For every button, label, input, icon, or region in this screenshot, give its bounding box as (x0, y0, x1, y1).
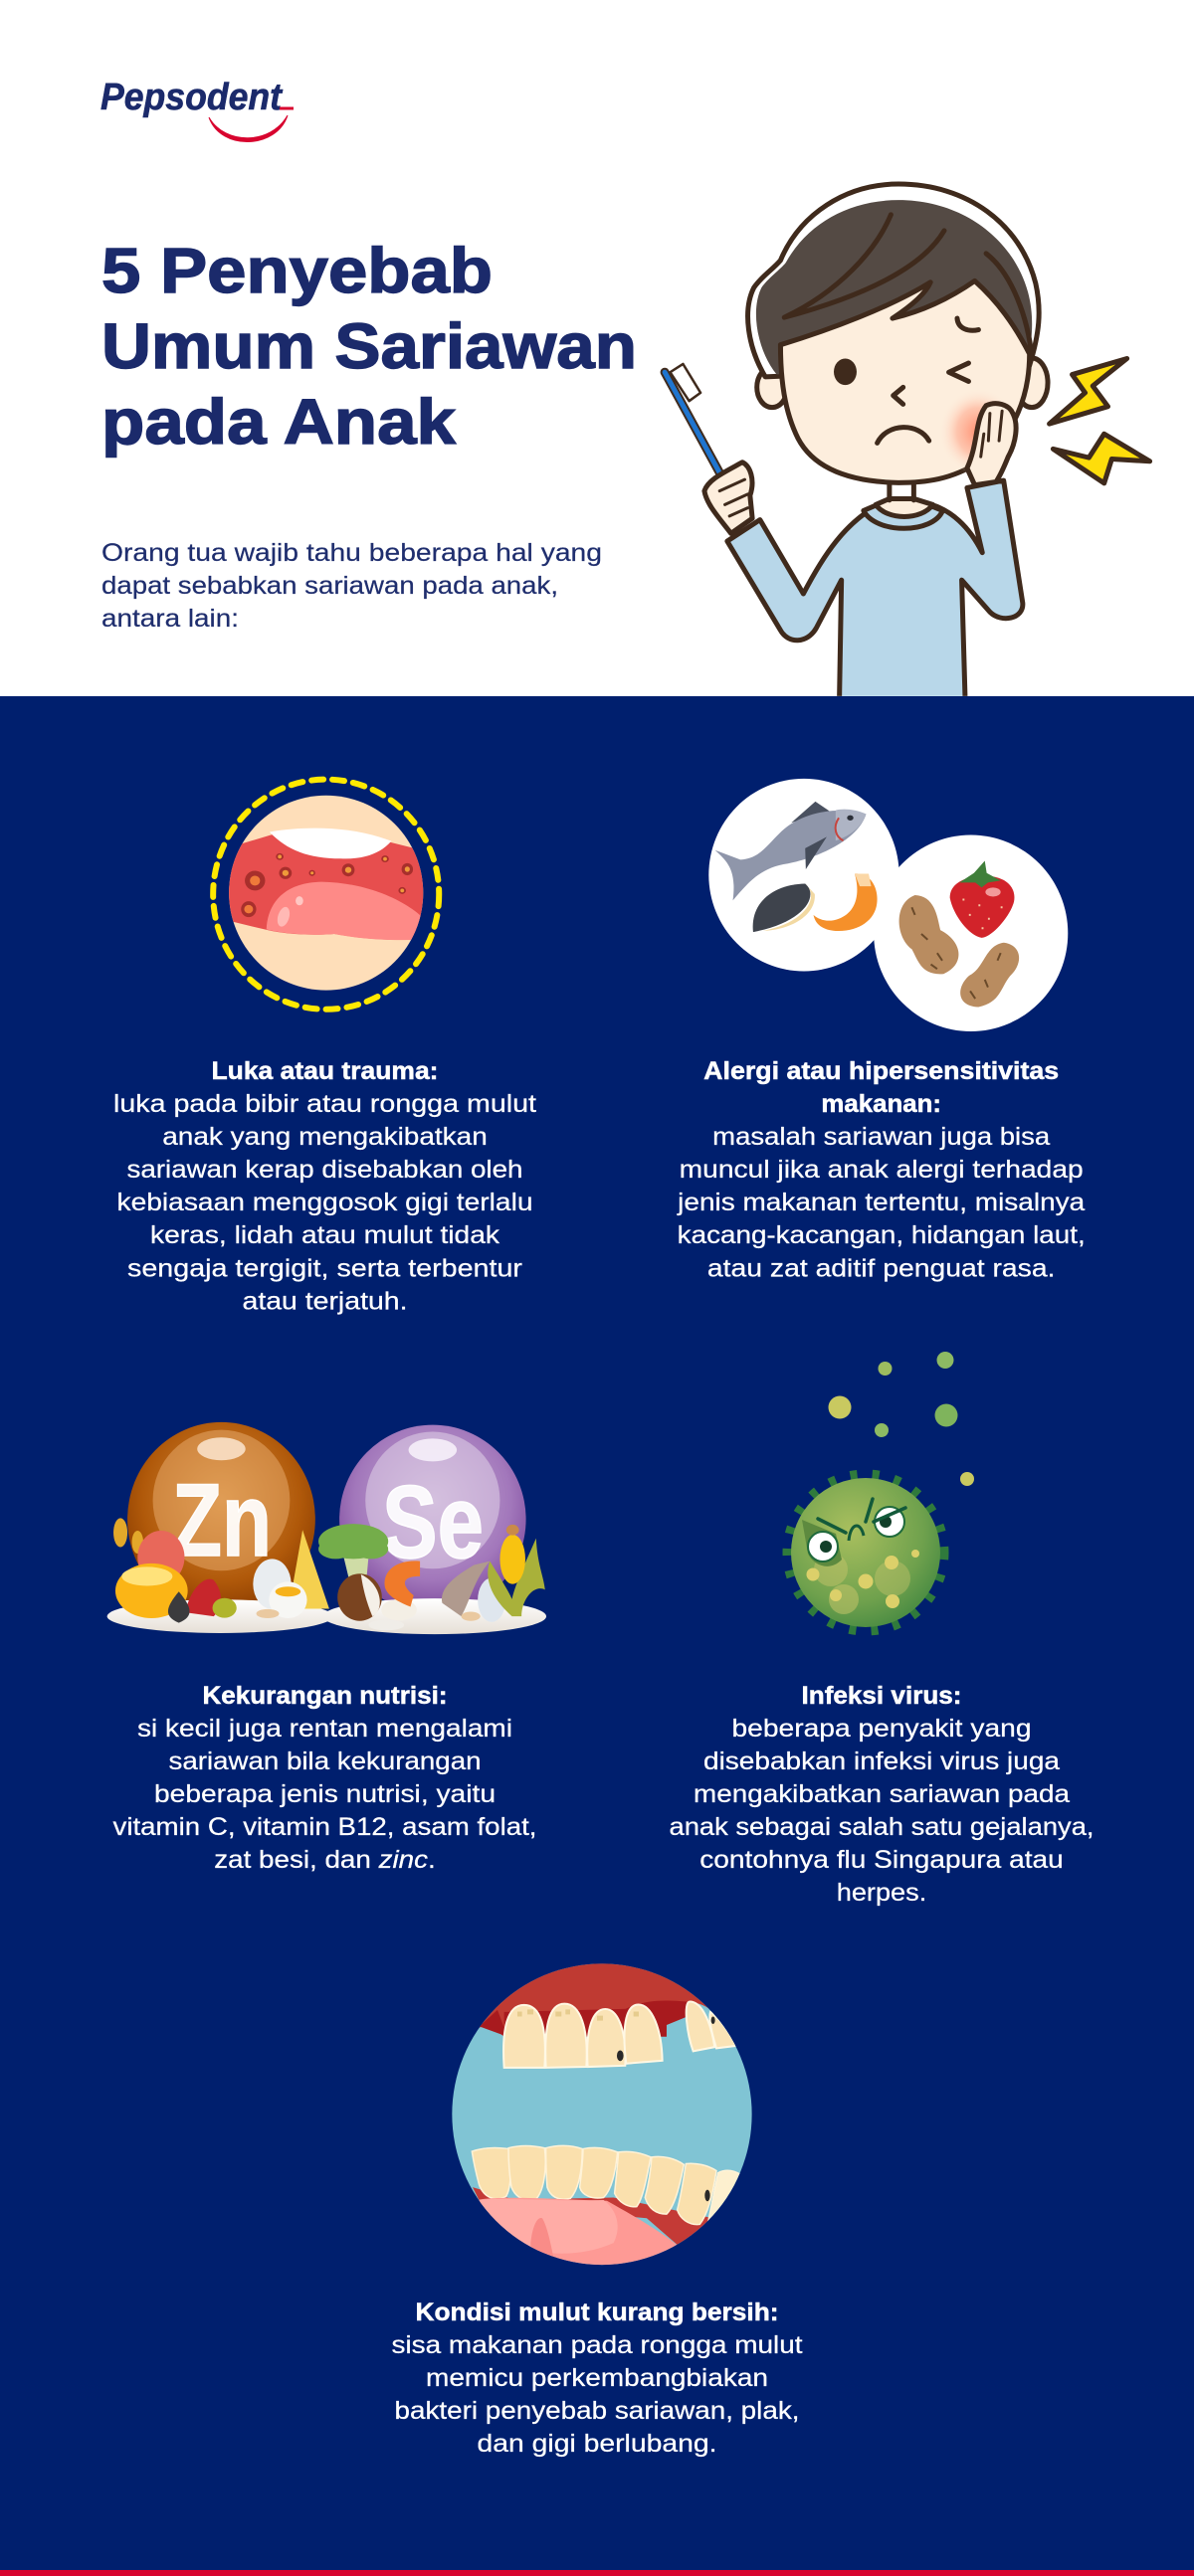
text: luka atau trauma: kebiasaan menggosok gigi terlalu (117, 1189, 533, 1216)
logo: Pepsodent (100, 77, 294, 142)
text: luka atau trauma: sengaja tergigit, serta terbentur (127, 1255, 522, 1283)
text: alergi: atau zat aditif penguat rasa. (707, 1255, 1055, 1283)
text: alergi: masalah sariawan juga bisa (712, 1123, 1050, 1151)
intro text: antara lain: (101, 605, 239, 633)
panel: alergi atau hipersensitivitas makanan (677, 779, 1086, 1283)
foods on plates (107, 1518, 546, 1634)
ears and hair outline (748, 184, 1048, 408)
zinc sphere (127, 1422, 315, 1616)
text: luka atau trauma (113, 1057, 536, 1315)
icon: angry green virus (788, 1475, 943, 1630)
text: alergi: jenis makanan tertentu, misalnya (677, 1189, 1085, 1216)
text: kondisi mulut: bakteri penyebab sariawan, plak, (394, 2397, 800, 2425)
icon: allergenic foods (708, 779, 1068, 1031)
icon: lightning bolts (1050, 358, 1150, 483)
text: infeksi virus: herpes. (837, 1879, 926, 1907)
hand holding toothbrush (704, 462, 752, 533)
text: alergi: Alergi atau hipersensitivitas (703, 1057, 1059, 1085)
lower gum (473, 2187, 713, 2247)
text: alergi: muncul jika anak alergi terhadap (680, 1156, 1084, 1184)
text: luka atau trauma: sariawan kerap disebabkan oleh (127, 1156, 523, 1184)
hand on cheek (967, 404, 1016, 485)
panel: infeksi virus (669, 1352, 1094, 1907)
text: luka atau trauma: atau terjatuh. (243, 1287, 408, 1315)
tongue (480, 2198, 677, 2266)
icon: toothbrush (665, 364, 719, 472)
icon: floating particles (828, 1352, 974, 1486)
text: alergi (677, 1057, 1086, 1283)
text: infeksi virus: anak sebagai salah satu gejalanya, (669, 1813, 1094, 1841)
text: kekurangan nutrisi: beberapa jenis nutrisi, yaitu (154, 1780, 496, 1808)
text: alergi: kacang-kacangan, hidangan laut, (678, 1221, 1086, 1249)
selenium label: Se (382, 1465, 484, 1580)
peanuts (899, 895, 1019, 1007)
neck (890, 482, 913, 500)
text: kekurangan nutrisi: si kecil juga rentan mengalami (137, 1715, 512, 1743)
text: kekurangan nutrisi (113, 1682, 537, 1874)
text: kondisi mulut: memicu perkembangbiakan (426, 2364, 768, 2392)
text: luka atau trauma: luka pada bibir atau rongga mulut (113, 1090, 536, 1118)
selenium sphere (339, 1425, 526, 1613)
hair strands (784, 215, 1032, 356)
title: Umum Sariawan (101, 310, 637, 382)
lower teeth (472, 2145, 741, 2225)
text: infeksi virus: mengakibatkan sariawan pada (694, 1780, 1070, 1808)
icon: dirty teeth in mouth (448, 1958, 756, 2272)
text: infeksi virus: Infeksi virus: (802, 1682, 961, 1710)
panel: luka atau trauma (113, 780, 536, 1315)
panel: kekurangan nutrisi (107, 1422, 546, 1874)
shirt and arms (727, 480, 1023, 712)
icon: zinc and selenium spheres with foods (107, 1422, 546, 1634)
text: kekurangan nutrisi: sariawan bila kekurangan (169, 1748, 482, 1775)
shrimp (814, 873, 878, 931)
text: kekurangan nutrisi: zat besi, dan zinc. (214, 1846, 436, 1874)
text: kondisi mulut: sisa makanan pada rongga mulut (392, 2331, 803, 2359)
text: kondisi mulut: dan gigi berlubang. (478, 2430, 716, 2458)
text: kondisi mulut: Kondisi mulut kurang bersih: (416, 2299, 778, 2326)
title: pada Anak (101, 386, 456, 458)
fish (715, 802, 866, 900)
text: luka atau trauma: keras, lidah atau mulut tidak (150, 1221, 500, 1249)
intro text: Orang tua wajib tahu beberapa hal yang (101, 539, 602, 567)
upper teeth (503, 2002, 736, 2068)
text: kondisi mulut (392, 2299, 803, 2458)
text: infeksi virus: beberapa penyakit yang (732, 1715, 1031, 1743)
icon: mouth with sores (213, 780, 439, 1010)
text: kekurangan nutrisi: Kekurangan nutrisi: (203, 1682, 448, 1710)
face (780, 280, 1030, 482)
text: alergi: makanan: (821, 1090, 941, 1118)
text: infeksi virus (669, 1682, 1094, 1907)
intro text: dapat sebabkan sariawan pada anak, (101, 572, 558, 600)
logo: Pepsodent: Pepsodent (100, 77, 283, 118)
mussel (753, 883, 815, 932)
strawberry (950, 861, 1014, 938)
title: 5 Penyebab (101, 235, 493, 306)
text: kekurangan nutrisi: vitamin C, vitamin B12, asam folat, (113, 1813, 537, 1841)
text: infeksi virus: disebabkan infeksi virus juga (703, 1748, 1060, 1775)
illustration: child with toothache holding toothbrush (665, 184, 1150, 712)
text: luka atau trauma: anak yang mengakibatkan (162, 1123, 488, 1151)
title (101, 235, 637, 458)
intro text (101, 539, 602, 633)
zinc label: Zn (172, 1463, 272, 1578)
text: luka atau trauma: Luka atau trauma: (211, 1057, 438, 1085)
text: infeksi virus: contohnya flu Singapura atau (699, 1846, 1064, 1874)
panel: kondisi mulut kurang bersih (392, 1958, 803, 2458)
